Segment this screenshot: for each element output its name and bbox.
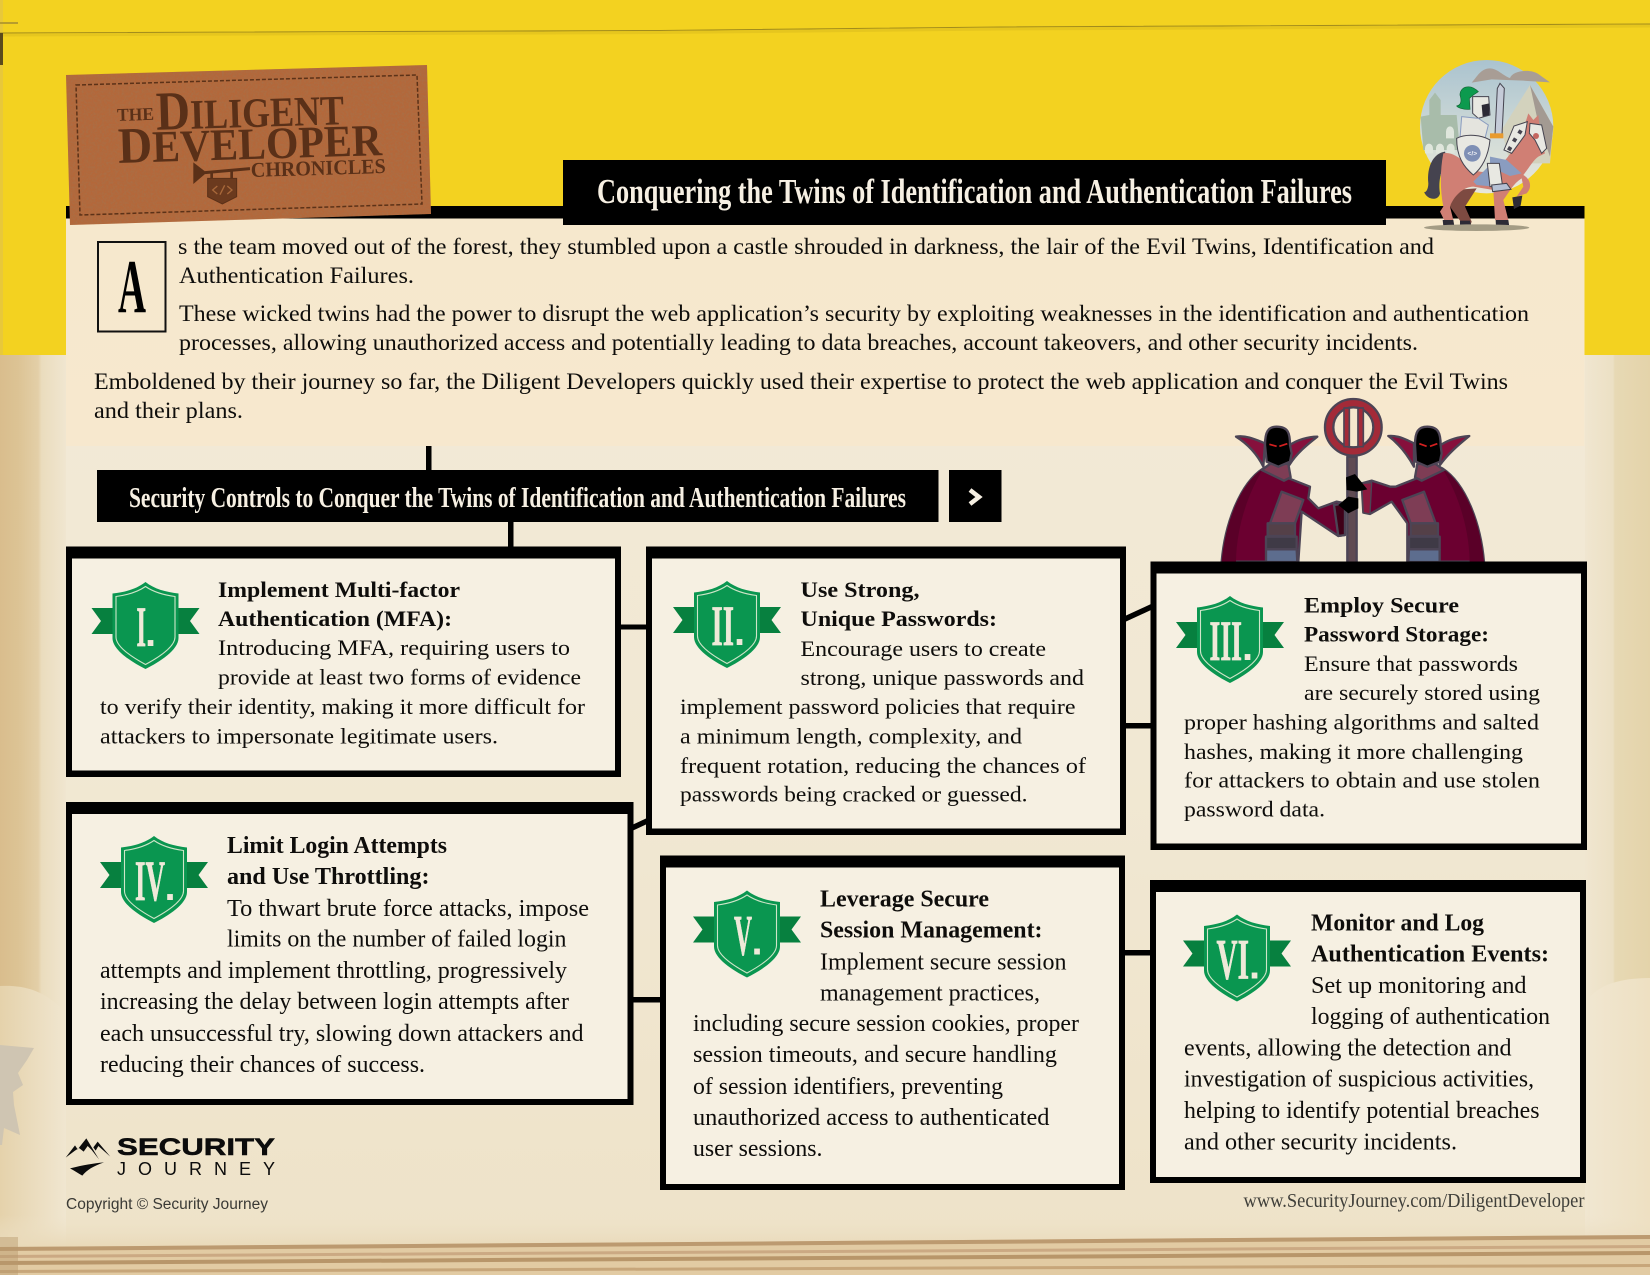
- card III text: are securely stored using: [1304, 680, 1540, 705]
- card V text: management practices,: [820, 980, 1040, 1006]
- card I text: Implement Multi-factor: [218, 577, 460, 602]
- icon: shield I: [92, 582, 200, 669]
- card II text: Unique Passwords:: [800, 606, 997, 631]
- card IV text: Limit Login Attempts: [227, 833, 447, 859]
- card IV text: increasing the delay between login attempts after: [100, 989, 569, 1015]
- card III text: [1184, 592, 1540, 822]
- card II text: [680, 577, 1087, 806]
- logo: leather patch The Diligent Developer Chronicles: [66, 65, 431, 225]
- logo: leather patch The Diligent Developer Chronicles: DEVELOPER: [117, 111, 383, 175]
- panel: VI. Monitor and Log Authentication Events: [1150, 880, 1586, 1183]
- icon: shield I: I: [136, 596, 146, 659]
- card VI text: Set up monitoring and: [1311, 973, 1526, 999]
- card VI text: Monitor and Log: [1311, 910, 1484, 936]
- icon: shield VI: VI: [1216, 928, 1249, 992]
- section heading bar: [97, 470, 938, 522]
- card V text: including secure session cookies, proper: [693, 1011, 1079, 1037]
- title bar: [563, 160, 1386, 225]
- panel: I. Implement Multi-factor Authentication: [66, 546, 621, 777]
- card II text: Use Strong,: [800, 577, 920, 602]
- title bar: Conquering the Twins of Identification and Authentication Failures: [597, 172, 1352, 211]
- card IV text: and Use Throttling:: [227, 864, 430, 890]
- icon: shield IV: .: [164, 865, 176, 909]
- card III text: password data.: [1184, 796, 1325, 822]
- card II text: frequent rotation, reducing the chances of: [680, 753, 1087, 778]
- card II text: Encourage users to create: [800, 636, 1046, 661]
- connector: panel to section bar: [426, 446, 432, 470]
- panel: III. Employ Secure Password Storage: [1150, 562, 1587, 850]
- card III text: Employ Secure: [1304, 592, 1459, 618]
- illustration: knight on horse: [1420, 60, 1553, 231]
- card VI text: and other security incidents.: [1184, 1130, 1457, 1156]
- card V text: of session identifiers, preventing: [693, 1074, 1003, 1100]
- card III text: hashes, making it more challenging: [1184, 739, 1523, 764]
- icon: shield III: III: [1210, 610, 1242, 673]
- icon: shield III: [1176, 596, 1284, 683]
- card I text: provide at least two forms of evidence: [218, 664, 581, 690]
- card V text: Implement secure session: [820, 950, 1066, 976]
- intro text: processes, allowing unauthorized access and potentially leading to data breaches, account takeovers, and other security incidents.: [179, 330, 1418, 355]
- card V text: Leverage Secure: [820, 886, 989, 912]
- icon: shield IV: IV: [135, 850, 165, 913]
- website url: www.SecurityJourney.com/DiligentDeveloper: [1244, 1190, 1585, 1212]
- icon: shield VI: [1183, 914, 1291, 1002]
- card V text: session timeouts, and secure handling: [693, 1042, 1057, 1068]
- card VI text: logging of authentication: [1311, 1004, 1550, 1030]
- intro text: [94, 234, 1530, 423]
- card V text: [693, 886, 1079, 1162]
- card V text: unauthorized access to authenticated: [693, 1105, 1050, 1131]
- card I text: [100, 577, 586, 748]
- card I text: attackers to impersonate legitimate users.: [100, 724, 498, 748]
- card VI text: [1184, 910, 1550, 1156]
- copyright: Copyright © Security Journey: [66, 1196, 268, 1213]
- logo: Security Journey: SECURITY: [117, 1134, 275, 1161]
- intro text: and their plans.: [94, 398, 243, 423]
- card IV text: [100, 833, 589, 1078]
- card II text: a minimum length, complexity, and: [680, 724, 1022, 748]
- connectors between cards: [620, 604, 1151, 1002]
- icon: shield V: V: [734, 904, 752, 968]
- icon: shield V: .: [752, 920, 763, 964]
- card III text: proper hashing algorithms and salted: [1184, 710, 1539, 734]
- card IV text: reducing their chances of success.: [100, 1052, 425, 1078]
- logo: leather patch The Diligent Developer Chronicles: CHRONICLES: [250, 154, 386, 182]
- card VI text: events, allowing the detection and: [1184, 1036, 1512, 1062]
- card II text: strong, unique passwords and: [800, 665, 1084, 690]
- arrow button: [949, 470, 1002, 522]
- intro text: Authentication Failures.: [179, 263, 414, 288]
- header rule: [66, 206, 1584, 218]
- card IV text: limits on the number of failed login: [227, 926, 566, 952]
- card I text: Authentication (MFA):: [218, 606, 452, 631]
- illustration: knight on horse: </>: [1468, 151, 1477, 158]
- icon: shield VI: .: [1249, 944, 1260, 988]
- logo: leather patch The Diligent Developer Chronicles: THE: [117, 104, 154, 125]
- icon: shield I: .: [145, 611, 156, 655]
- drop cap A: [98, 242, 166, 332]
- card I text: Introducing MFA, requiring users to: [218, 635, 570, 660]
- intro text: Emboldened by their journey so far, the Diligent Developers quickly used their expertise to protect the web application and conquer the Evil Twins: [94, 369, 1508, 394]
- card I text: to verify their identity, making it more difficult for: [100, 694, 586, 719]
- card V text: Session Management:: [820, 918, 1042, 944]
- icon: shield IV: [100, 836, 208, 923]
- icon: shield III: .: [1242, 625, 1253, 669]
- connector: section bar to card I: [508, 522, 514, 547]
- logo: leather patch The Diligent Developer Chronicles: DILIGENT: [155, 75, 345, 142]
- logo: Security Journey: JOURNEY: [117, 1159, 275, 1179]
- icon: mountains: [66, 1138, 110, 1176]
- icon: shield V: [693, 890, 801, 978]
- intro text: s the team moved out of the forest, they stumbled upon a castle shrouded in darkness, the lair of the Evil Twins, Identification and: [178, 234, 1435, 259]
- icon: shield II: .: [734, 610, 745, 654]
- card III text: for attackers to obtain and use stolen: [1184, 768, 1540, 792]
- card V text: user sessions.: [693, 1136, 822, 1162]
- panel: II. Use Strong, Unique Passwords: [646, 546, 1126, 835]
- icon: shield II: II: [712, 595, 734, 658]
- panel: intro background: [66, 218, 1584, 446]
- card II text: implement password policies that require: [680, 694, 1076, 719]
- card IV text: To thwart brute force attacks, impose: [227, 896, 589, 922]
- section heading bar: Security Controls to Conquer the Twins of Identification and Authentication Failures: [129, 482, 906, 514]
- illustration: evil twins with staff: [1222, 399, 1484, 563]
- card VI text: helping to identify potential breaches: [1184, 1098, 1540, 1124]
- card VI text: investigation of suspicious activities,: [1184, 1066, 1534, 1092]
- card II text: passwords being cracked or guessed.: [680, 782, 1028, 806]
- card IV text: attempts and implement throttling, progressively: [100, 958, 567, 984]
- logo: Security Journey: [66, 1134, 275, 1179]
- card IV text: each unsuccessful try, slowing down attackers and: [100, 1021, 584, 1047]
- icon: shield II: [673, 581, 781, 668]
- card III text: Ensure that passwords: [1304, 651, 1518, 676]
- panel: IV. Limit Login Attempts: [66, 802, 634, 1105]
- intro text: These wicked twins had the power to disrupt the web application’s security by exploiting weaknesses in the identification and authentication: [179, 301, 1530, 326]
- drop cap A: A: [118, 245, 146, 329]
- card III text: Password Storage:: [1304, 622, 1489, 646]
- panel: V. Leverage Secure Session Management: [660, 856, 1125, 1190]
- card VI text: Authentication Events:: [1311, 942, 1549, 968]
